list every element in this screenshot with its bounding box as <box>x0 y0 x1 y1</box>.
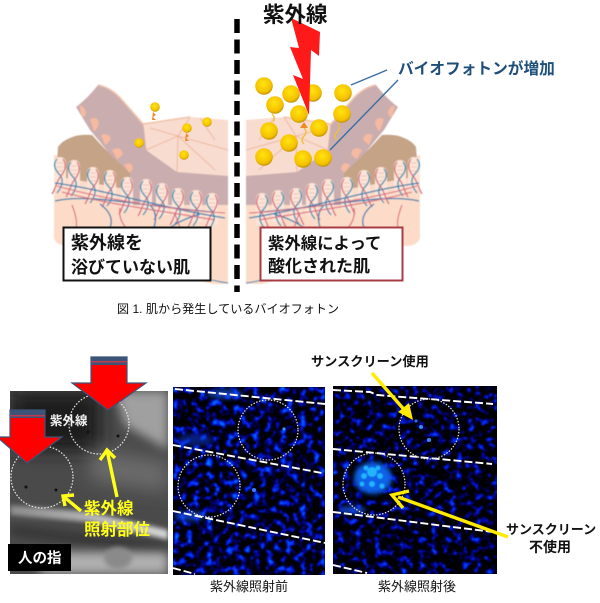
label box: unexposed skin <box>64 228 210 280</box>
panel: before UV image <box>173 387 325 575</box>
caption: after UV: 紫外線照射後 <box>378 579 456 594</box>
icon: red lightning bolt <box>290 18 320 115</box>
label: human finger: 人の指 <box>18 549 62 567</box>
yellow arrows: irradiation sites <box>63 450 117 511</box>
caption: 図 1. 肌から発生しているバイオフォトン <box>117 302 339 316</box>
panel: after UV image <box>333 386 497 574</box>
label: biophoton increase: バイオフォトンが増加 <box>398 59 555 78</box>
biophoton particles: unexposed skin <box>134 102 212 160</box>
label box: oxidised skin: 酸化された肌 <box>268 257 370 276</box>
label: irradiated site <box>84 499 150 539</box>
label box: oxidised skin: 紫外線によって <box>268 234 381 253</box>
arrow: UV right <box>72 357 146 410</box>
label box: unexposed skin: 紫外線を <box>71 233 143 253</box>
label box: unexposed skin: 浴びていない肌 <box>71 258 190 277</box>
label: sunscreen not used: サンスクリーン <box>506 522 596 537</box>
label: irradiated site: 紫外線 <box>84 499 134 518</box>
heading: ultraviolet: 紫外線 <box>263 3 328 27</box>
label: sunscreen used: サンスクリーン使用 <box>311 353 429 369</box>
panel: finger photo <box>10 391 168 574</box>
label: human finger <box>8 544 71 571</box>
label box: oxidised skin <box>260 228 402 280</box>
label: irradiated site: 照射部位 <box>84 520 150 539</box>
label: sunscreen not used: 不使用 <box>529 539 571 555</box>
label: sunscreen not used <box>506 522 596 555</box>
skin illustration: unexposed skin <box>52 85 228 284</box>
skin illustration: UV-oxidised skin <box>246 85 422 284</box>
dashed divider <box>234 19 240 292</box>
yellow arrows: sunscreen <box>372 373 508 537</box>
arrow: UV left <box>0 410 62 463</box>
label: UV on photo: 紫外線 <box>50 413 88 428</box>
biophoton particles: oxidised skin <box>255 77 352 168</box>
caption: before UV: 紫外線照射前 <box>210 579 288 594</box>
leader lines <box>330 70 398 150</box>
